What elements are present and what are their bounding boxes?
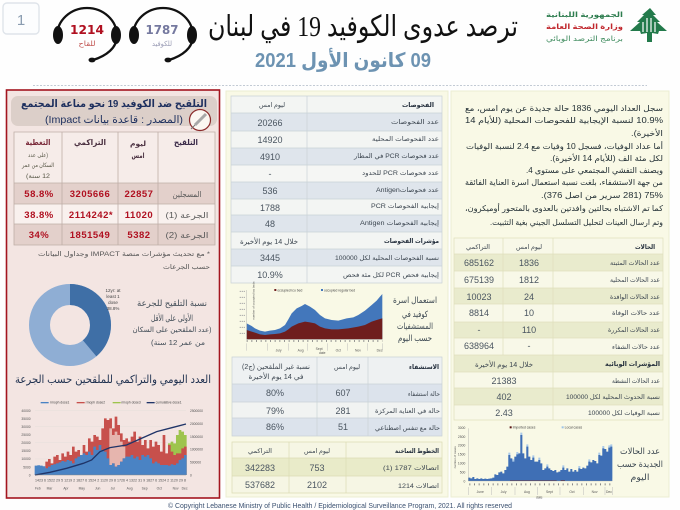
bar chart: daily new cases: 2000 [458, 444, 465, 448]
bar chart: daily vaccinations by dose: 2500000 [190, 409, 203, 413]
hospitalisation table: ليوم امس [334, 364, 360, 371]
daily summary paragraph [465, 104, 663, 227]
bar chart: daily vaccinations by dose: Mar [47, 487, 53, 491]
cases table: 638964 [464, 341, 494, 351]
bar chart: daily new cases: Imported cases [513, 426, 536, 430]
bar chart: daily vaccinations by dose: Feb [35, 487, 41, 491]
cases table: 24 [524, 292, 534, 302]
bar chart: daily new cases: 0 [463, 479, 465, 483]
hotlines table: اتصالات 1214 [398, 483, 439, 490]
cases table [454, 238, 663, 420]
footnote: حسب الجرعات [163, 264, 210, 271]
bar chart: daily vaccinations by dose: 15000 [21, 449, 31, 453]
hospitalisation table: في 14 يوم الأخيرة [248, 372, 304, 381]
logo: cedar tree [630, 8, 667, 42]
hotlines table: 753 [309, 463, 325, 473]
vaccination table: التلقيح [174, 138, 198, 147]
subtitle: date: 09 كانون الأول 2021 [255, 47, 431, 72]
hotlines table: 2102 [307, 480, 327, 490]
panel: vaccination [6, 90, 220, 498]
area chart: occupied hospital beds: Nov [355, 348, 361, 352]
tests table: نسبة الفحوصات المحلية لكل 100000 [335, 255, 439, 262]
area chart: occupied hospital beds: number of occupied icu beds [252, 281, 256, 320]
tests table: 1788 [260, 203, 280, 213]
tests table: مؤشرات الفحوصات [384, 238, 439, 245]
vaccination table: 1851549 [70, 230, 110, 241]
bar chart: daily vaccinations by dose: 25000 [21, 433, 31, 437]
donut caption [132, 298, 212, 347]
bar chart: daily vaccinations by dose [21, 401, 203, 491]
bar chart: daily new cases: Aug [524, 490, 530, 494]
copyright footer: © Copyright Lebanese Ministry of Public Health / Epidemiological Surveillance Program, 2021. All rights reserved [168, 501, 512, 510]
new cases caption [617, 446, 663, 482]
tests table: الفحوصات [402, 102, 434, 109]
hospitalisation table: حالة استشفاء [408, 391, 440, 398]
cases table: المؤشرات الوبائية [605, 361, 660, 368]
hospitalisation table: 51 [338, 422, 348, 432]
daily summary paragraph: وتم ارسال العينات لتحليل التسلسل الجيني بغية التثبيت. [490, 218, 663, 227]
tests table: عدد فحوصات PCR في المطار [353, 153, 439, 160]
cases table: التراكمي [466, 244, 490, 251]
bar chart: daily vaccinations by dose: Apr [63, 487, 69, 491]
vaccination table [14, 132, 215, 245]
bar chart: daily vaccinations by dose: 1423 6 1522 29 5 1219 2 1827 6 1524 2 1120 29 8 1726 4 1322 31 9 1827 6 1524 2 1120 29 8 [35, 479, 186, 483]
daily summary paragraph: 75% (281 سرير من اصل 376). [541, 191, 663, 200]
bar chart: daily vaccinations by dose: 20000 [21, 441, 31, 445]
bar chart: daily vaccinations by dose: 5000 [23, 465, 31, 469]
vaccination table: المسجلين [172, 190, 202, 199]
cases table: 2.43 [495, 408, 513, 418]
bar chart: daily new cases: Nov [592, 490, 598, 494]
cases table: - [528, 341, 530, 351]
bed usage caption: كوفيد في [402, 309, 429, 319]
vaccination table: امس [132, 153, 144, 160]
daily summary paragraph: أما عداد الوفيات، فسجل 10 وفيات مع 2.4 لنسبة الوفيات [466, 141, 663, 151]
area chart: occupied hospital beds: Oct [336, 348, 341, 352]
vaccination table: الجرعة (1) [166, 211, 208, 220]
cases table: 675139 [464, 275, 494, 285]
bar chart: daily new cases: number of cases [453, 446, 457, 468]
bar chart: daily vaccinations by dose: Nov [173, 487, 179, 491]
cases table: 110 [522, 325, 536, 335]
tests table: خلال 14 يوم الأخيرة [240, 237, 298, 246]
tests table: 4910 [260, 152, 280, 162]
cases table: عدد حالات الوفاة [612, 310, 660, 317]
hotlines table [232, 442, 442, 493]
vaccination table: ليوم [130, 141, 146, 148]
logo: ministry text: برنامج الترصد الوبائي [546, 36, 623, 43]
footnote [38, 251, 211, 271]
bar chart: daily new cases: July [501, 490, 507, 494]
tests table: عدد الفحوصات المحلية [372, 136, 439, 143]
bar chart: daily vaccinations by dose: May [79, 487, 85, 491]
bar chart: daily vaccinations by dose: Jun [95, 487, 101, 491]
logo: ministry text: الجمهورية اللبنانية [546, 12, 623, 19]
area chart: occupied hospital beds: date [319, 351, 326, 355]
vaccination table: 34% [29, 230, 49, 241]
hospitalisation table: 607 [335, 388, 351, 398]
daily summary paragraph: الأخيرة). [631, 128, 663, 138]
vaccination table: 12 سنة) [26, 174, 51, 180]
daily summary paragraph: 10.9% لنسبة الإيجابية للفحوصات المحلية (للأيام 14 [465, 115, 663, 125]
hospitalisation table [232, 357, 442, 436]
tests table: 10.9% [257, 270, 283, 280]
bar chart: daily vaccinations by dose: 1000000 [190, 448, 203, 452]
hotlines table: التراكمي [248, 448, 272, 455]
donut chart: first dose coverage: 38.8% [107, 306, 119, 311]
icon: vaccine hotline headset 1214 [53, 8, 121, 62]
heading: vaccination strip: التلقيح ضد الكوفيد 19 نحو مناعة المجتمع [21, 98, 207, 110]
area chart: occupied hospital beds: Aug [298, 348, 304, 352]
donut caption: نسبة التلقيح للجرعة [137, 298, 207, 308]
cases table: الحالات [635, 244, 655, 251]
bed usage caption: استعمال اسرة [393, 295, 437, 305]
vaccination table: التغطية [26, 138, 51, 147]
bar chart: daily new cases [453, 426, 612, 499]
bar chart: daily vaccinations by dose: rmoph dose1 [50, 401, 70, 405]
vaccination table: (على عدد [28, 152, 48, 159]
hospitalisation table: الاستشفاء [409, 364, 439, 371]
bar chart: daily new cases: Dec [606, 490, 612, 494]
icon: syringe [190, 110, 210, 130]
daily summary paragraph: كما تم الاشتباه بحالتين وافدتين بالعدوى بالمتحور أوميكرون، [465, 203, 663, 213]
bed usage caption: حسب اليوم [398, 333, 432, 343]
icon: COVID hotline headset 1787: 1787 [146, 22, 178, 37]
hospitalisation table: 79% [266, 406, 284, 416]
bar chart: daily new cases: 2500 [458, 435, 465, 439]
bar chart: daily new cases: 500 [460, 470, 465, 474]
page number box: 1 [17, 12, 25, 29]
tests table [231, 96, 442, 283]
bed usage caption [393, 295, 437, 343]
page number box [3, 3, 39, 34]
cases table: 1836 [519, 258, 539, 268]
area chart: occupied hospital beds: occupied icu bed [277, 288, 302, 292]
new cases caption: الجديدة حسب [617, 459, 663, 469]
bar chart: daily new cases: Oct [569, 490, 575, 494]
vaccination table: التراكمي [74, 138, 106, 147]
tests table: 536 [262, 186, 278, 196]
area chart: occupied hospital beds: July [276, 348, 282, 352]
tests table: - [268, 169, 272, 179]
cases table: 21383 [491, 376, 517, 386]
cases table: عدد الحالات النشطة [612, 378, 660, 385]
vaccination table: الجرعة (2) [166, 231, 208, 240]
hospitalisation table: 86% [266, 422, 284, 432]
heading: vaccination strip: (المصدر : قاعدة بيانات Impact) [45, 114, 183, 126]
bar chart: daily vaccinations by dose: Jul [111, 487, 115, 491]
hotlines table: ليوم امس [304, 448, 330, 455]
bar chart: daily vaccinations by dose: 500000 [190, 460, 201, 464]
donut caption: (عدد الملقحين على السكان [132, 326, 212, 334]
bar chart: daily vaccinations by dose: Aug [127, 487, 133, 491]
donut caption: من عمر 12 سنة) [151, 340, 205, 347]
cases table: 10023 [466, 292, 492, 302]
cases table: عدد حالات الشفاء [612, 344, 660, 351]
area chart: occupied hospital beds [240, 281, 383, 355]
cases table: 685162 [464, 258, 494, 268]
tests table: 14920 [257, 135, 283, 145]
icon: vaccine hotline headset 1214: 1214 [70, 22, 104, 37]
icon: COVID hotline headset 1787: للكوفيد [152, 40, 172, 48]
cases table: 8814 [469, 308, 489, 318]
cases table: عدد الحالات الوافدة [610, 294, 660, 301]
bar chart: daily vaccinations by dose: 2000000 [190, 422, 203, 426]
vaccination table: 5382 [127, 230, 151, 241]
daily summary paragraph: من جهة الاستشفاء، بلغت نسبة استعمال اسرة العناية الفائقة [465, 178, 663, 187]
bar chart: daily vaccinations by dose: 0 [190, 473, 192, 477]
donut chart: first dose coverage: dose [108, 300, 118, 305]
heading: daily and cumulative chart: العدد اليومي والتراكمي للملقحين حسب الجرعة [15, 374, 211, 386]
area chart: occupied hospital beds: Sept [316, 347, 323, 351]
tests table: إيجابية الفحوصات PCR [371, 203, 439, 210]
cases table: 10 [524, 308, 534, 318]
hospitalisation table: حالة في العناية المركزة [375, 408, 440, 415]
daily summary paragraph: ويصنف التفشي المجتمعي على مستوى 4. [526, 166, 663, 175]
daily summary paragraph: لكل مئة الف (للأيام 14 الأخيرة). [550, 153, 663, 163]
vaccination table: 38.8% [24, 210, 54, 221]
logo: ministry text: وزارة الصحة العامة [546, 24, 623, 31]
cases table: عدد الحالات المكررة [608, 327, 660, 334]
cases table: نسبة الوفيات لكل 100000 [588, 410, 660, 417]
vaccination table: 3205666 [70, 189, 110, 200]
bar chart: daily new cases: Sept [546, 490, 553, 494]
cases table: خلال 14 يوم الأخيرة [475, 360, 533, 369]
bar chart: daily vaccinations by dose: rmoph dose3 [121, 401, 141, 405]
cases table: - [478, 325, 480, 335]
tests table: 3445 [260, 253, 280, 263]
bar chart: daily new cases: June [477, 490, 484, 494]
tests table: 20266 [257, 118, 283, 128]
tests table: إيجابية فحص PCR لكل مئة فحص [343, 272, 439, 279]
tests table: عدد فحوصات PCR للحدود [362, 170, 439, 177]
vaccination table: 11020 [125, 210, 153, 221]
bar chart: daily vaccinations by dose: 1500000 [190, 435, 203, 439]
tests table: ليوم امس [259, 102, 285, 109]
panel: cases [451, 91, 669, 499]
icon: COVID hotline headset 1787 [129, 8, 197, 62]
donut chart: first dose coverage: least 1 [106, 294, 120, 299]
bar chart: daily vaccinations by dose: cumulative dose1 [156, 401, 182, 405]
cases table: عدد الحالات المحلية [610, 277, 660, 284]
donut caption: الأولى على الأقل [151, 313, 193, 323]
cases table: عدد الحالات المثبتة [610, 260, 660, 267]
new cases caption: عدد الحالات [620, 446, 660, 456]
bar chart: daily vaccinations by dose: 0 [29, 473, 31, 477]
bar chart: daily new cases: 3000 [458, 426, 465, 430]
tests table: إيجابية الفحوصات Antigen [360, 220, 439, 227]
vaccination table: 22857 [125, 189, 153, 200]
hotlines table: الخطوط الساخنة [395, 448, 439, 455]
vaccination table: 58.8% [24, 189, 54, 200]
donut chart: first dose coverage: 12yr: at [105, 288, 121, 293]
hospitalisation table: نسبة غير الملقحين (ج2) [242, 364, 310, 371]
dashed divider [33, 84, 647, 86]
cases table: ليوم امس [516, 244, 542, 251]
hospitalisation table: حالة مع تنفس اصطناعي [375, 425, 440, 432]
logo: ministry text [546, 12, 623, 43]
heading: vaccination strip [11, 96, 217, 126]
tests table: 48 [265, 219, 275, 229]
bar chart: daily new cases: 1500 [458, 453, 465, 457]
footnote: * مع تحديث مؤشرات منصة IMPACT وجداول البيانات [38, 251, 211, 258]
bar chart: daily new cases: Local cases [565, 426, 583, 430]
bar chart: daily new cases: 1000 [458, 462, 465, 466]
hospitalisation table: 80% [266, 388, 284, 398]
vaccination table: السكان من عمر [21, 162, 54, 169]
bar chart: daily vaccinations by dose: Sep [142, 487, 148, 491]
bar chart: daily vaccinations by dose: 10000 [21, 457, 31, 461]
bed usage caption: المستشفيات [397, 321, 433, 331]
bar chart: daily vaccinations by dose: Dec [182, 487, 188, 491]
area chart: occupied hospital beds: occupied regular bed [324, 288, 355, 292]
panel: tests and hospitals [226, 91, 448, 497]
hotlines table: اتصالات 1787 (1) [383, 465, 439, 472]
cases table: 402 [496, 392, 512, 402]
tests table: عدد فحوصاتAntigen [376, 187, 439, 194]
hotlines table: 537682 [245, 480, 275, 490]
hospitalisation table: 281 [335, 406, 351, 416]
bar chart: daily vaccinations by dose: 30000 [21, 425, 31, 429]
bar chart: daily new cases: date [536, 495, 543, 499]
icon: vaccine hotline headset 1214: للقاح [78, 41, 96, 48]
vaccination table: 2114242* [69, 210, 113, 221]
cases table: نسبة الحدوث المحلية لكل 100000 [566, 394, 660, 401]
area chart: occupied hospital beds: Dec [377, 348, 383, 352]
title: ترصد عدوى الكوفيد 19 في لبنان [208, 11, 518, 44]
bar chart: daily vaccinations by dose: rmoph dose2 [86, 401, 105, 405]
donut chart: first dose coverage [40, 288, 121, 356]
bar chart: daily vaccinations by dose: 35000 [21, 417, 31, 421]
hotlines table: 342283 [245, 463, 275, 473]
daily summary paragraph: سجل العداد اليومي 1836 حالة جديدة عن يوم امس، مع [465, 104, 663, 113]
bar chart: daily vaccinations by dose: 40000 [21, 409, 31, 413]
tests table: عدد الفحوصات [391, 119, 439, 126]
cases table: 1812 [519, 275, 539, 285]
bar chart: daily vaccinations by dose: Oct [157, 487, 162, 491]
new cases caption: اليوم [630, 472, 650, 482]
